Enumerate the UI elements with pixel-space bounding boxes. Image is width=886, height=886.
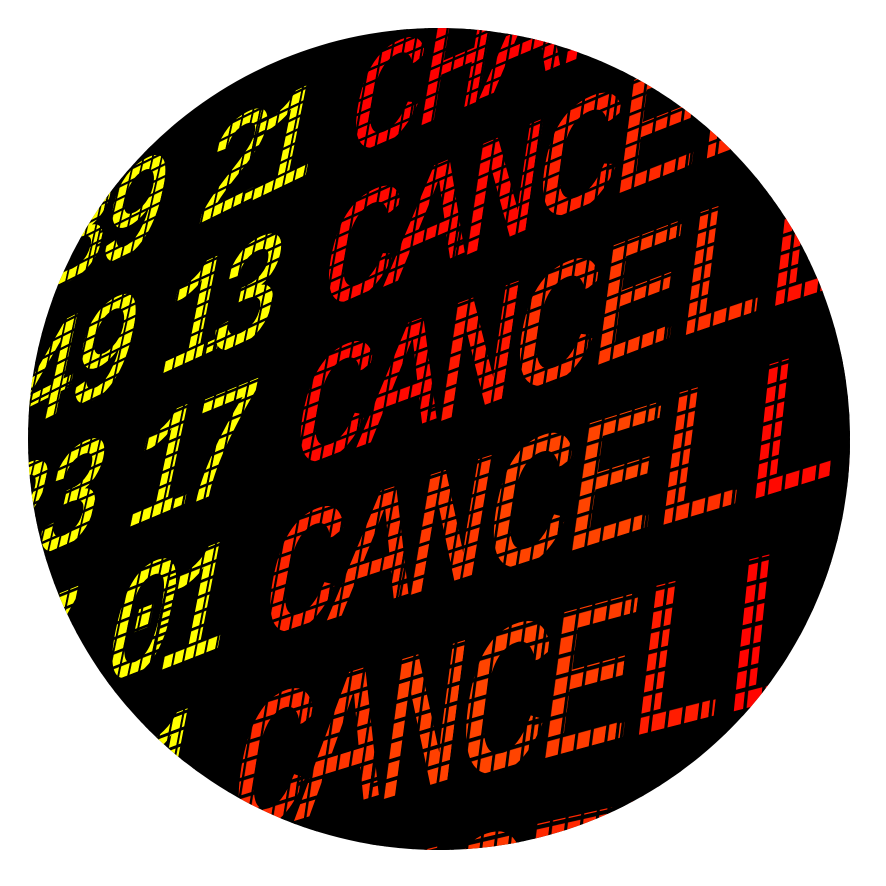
status row 3: CANCELLED: L bbox=[661, 154, 785, 396]
status row 3: CANCELLED: N bbox=[422, 249, 533, 479]
status row 5: CANCELLED: L bbox=[707, 499, 844, 786]
yellow time digits: 2 bbox=[183, 74, 285, 272]
yellow time digits: 1 bbox=[234, 50, 335, 250]
yellow time digits: 3 bbox=[194, 196, 300, 408]
status row 5: CANCELLED: C bbox=[443, 575, 567, 849]
status row 4: CANCELLED: L bbox=[730, 305, 861, 566]
status row 3: CANCELLED bbox=[300, 178, 824, 462]
status row 1: CHANGED: C bbox=[335, 0, 440, 205]
status row 4: CANCELLED: C bbox=[471, 392, 590, 634]
status row 4: CANCELLED: A bbox=[319, 447, 433, 674]
yellow time digits: 7 bbox=[163, 349, 272, 560]
status row 3: CANCELLED: C bbox=[498, 218, 615, 452]
status row 3: CANCELLED: L bbox=[750, 121, 879, 370]
status row 4: CANCELLED: C bbox=[247, 467, 360, 694]
status row 5: CANCELLED: E bbox=[523, 554, 654, 828]
status row 4: CANCELLED bbox=[270, 328, 850, 632]
yellow time digits: 9 bbox=[83, 120, 184, 314]
status row 5: CANCELLED: A bbox=[286, 623, 403, 884]
status row 2: CANCELLED: C bbox=[523, 54, 637, 280]
status row 2: CANCELLED bbox=[328, 70, 733, 302]
status row 5: CANCELLED bbox=[228, 516, 843, 832]
yellow time digits: 0 bbox=[88, 521, 196, 737]
status row 3: CANCELLED: C bbox=[278, 303, 389, 523]
status row 4: CANCELLED: E bbox=[551, 367, 676, 613]
yellow time digits bbox=[28, 86, 308, 774]
status row 2: CANCELLED: C bbox=[307, 148, 416, 362]
yellow time digits: 1 bbox=[145, 220, 246, 424]
yellow time digits: 3 bbox=[29, 145, 128, 338]
status row 3: CANCELLED: A bbox=[349, 278, 460, 498]
status row 2: CANCELLED: A bbox=[376, 120, 486, 336]
yellow time digits: 1 bbox=[143, 505, 250, 725]
status row 2: CANCELLED: E bbox=[600, 22, 716, 250]
status row 3: CANCELLED: E bbox=[579, 186, 696, 424]
status row 5: CANCELLED: L bbox=[612, 528, 747, 808]
yellow time digits: 3 bbox=[20, 403, 123, 607]
status row 4: CANCELLED: N bbox=[391, 423, 506, 653]
status row 4: CANCELLED: L bbox=[638, 336, 766, 590]
status row 1: CHANGED bbox=[356, 28, 602, 148]
status row 2: CANCELLED: N bbox=[448, 88, 557, 310]
yellow time digits: 9 bbox=[53, 259, 155, 458]
status row 5: CANCELLED: N bbox=[363, 602, 482, 866]
yellow time digits: 1 bbox=[111, 367, 217, 579]
status row 6: CANCELLED (cropped) bbox=[370, 770, 682, 850]
